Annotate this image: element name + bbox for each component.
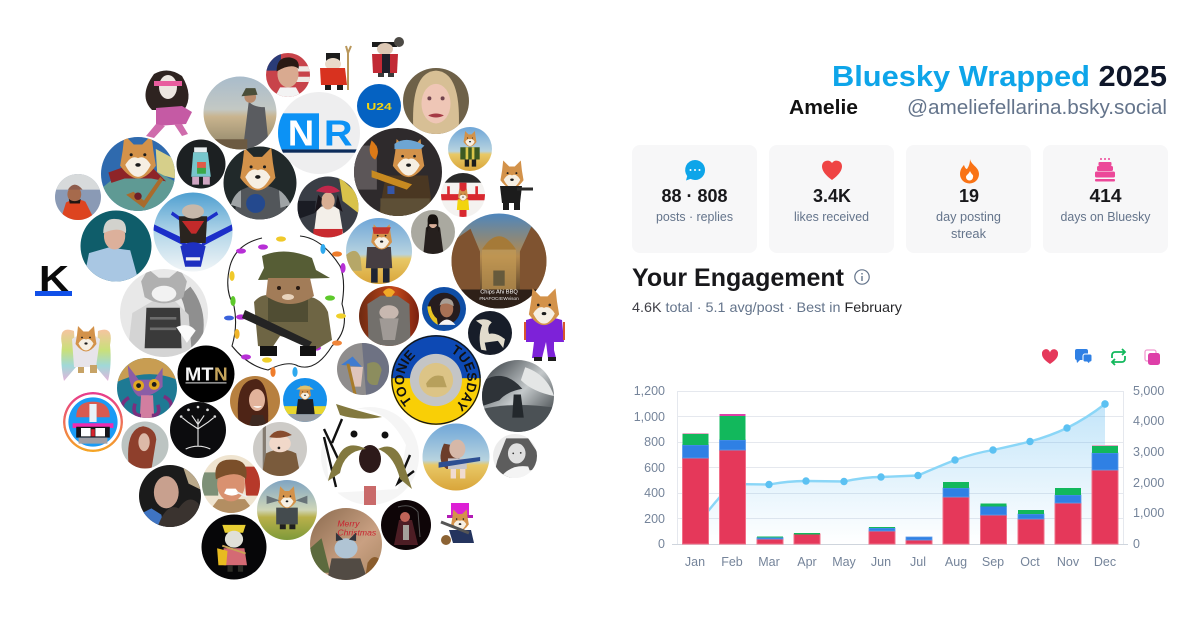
right axis labels: 2,000 (1133, 476, 1164, 490)
month labels: Jan (685, 555, 705, 569)
icon: info (855, 270, 869, 284)
avatar: doge in suit sticker (500, 160, 533, 210)
chart legend (1042, 349, 1160, 365)
avatar: white horse figurine (468, 311, 512, 355)
avatar: glass jar palace: Chips Ahi BBQ (480, 289, 518, 295)
handle: @ameliefellarina.bsky.social (907, 97, 1167, 119)
avatar: Kate portrait (230, 376, 280, 426)
stacked bars: reposts (682, 416, 1118, 538)
left axis labels: 0 (658, 537, 665, 551)
month labels: Oct (1020, 555, 1040, 569)
stat value: 19 (959, 186, 979, 206)
avatar: Merry Christmas cat: Merry (337, 519, 360, 529)
stat card: posts and replies (632, 145, 757, 253)
left axis labels: 400 (644, 486, 665, 500)
avatar: doge with purple top hat sticker (441, 503, 474, 545)
right axis labels (1133, 384, 1164, 551)
left axis labels: 1,200 (634, 384, 665, 398)
avatar: teal masked figure (176, 140, 226, 188)
avatar: doge with guitar in wheat (422, 424, 490, 490)
month labels: Feb (721, 555, 743, 569)
stat value: 414 (1090, 186, 1122, 206)
avatar: K logo: K (39, 258, 69, 299)
icon: flame (960, 159, 979, 184)
avatar: Georgian flag doge (441, 173, 485, 217)
right axis labels: 3,000 (1133, 445, 1164, 459)
left axis labels: 1,000 (634, 410, 665, 424)
month labels: Mar (758, 555, 780, 569)
avatar: blonde woman (403, 68, 469, 134)
cumulative line (695, 404, 1105, 528)
avatar: Toonie Tuesday coin badge (391, 335, 481, 425)
icon: heart (822, 161, 842, 180)
left axis labels (634, 384, 665, 551)
stat value: 88 · 808 (662, 186, 728, 206)
avatar: doge in front of burning Kremlin (354, 128, 442, 216)
avatar: doge in purple tracksuit sticker (525, 288, 564, 361)
avatar: stormy wave (482, 360, 554, 432)
display name: Amelie (789, 97, 858, 119)
stat label: likes received (794, 209, 869, 224)
avatar: Merry Christmas cat: Christmas (337, 527, 377, 537)
avatar: woman with cat (139, 465, 201, 527)
stat label: days on Bluesky (1060, 209, 1151, 224)
cumulative area (695, 404, 1105, 544)
avatar: doge scout in wheat (346, 218, 412, 284)
avatar: armored shiba with axe (101, 135, 175, 211)
stat label: posts · replies (656, 209, 733, 224)
avatar: rainbow angel doge sticker (61, 326, 111, 381)
cat (242, 251, 332, 356)
avatar: doge in fur coat with scumbag hat (253, 422, 307, 476)
month labels (685, 555, 1116, 569)
month labels: Aug (945, 555, 967, 569)
avatar: MTN logo: N (214, 363, 228, 384)
legend: replies (1075, 349, 1092, 364)
stat label: day posting (936, 209, 1001, 224)
left axis labels: 200 (644, 512, 665, 526)
stat card: days on Bluesky (1043, 145, 1168, 253)
engagement chart (634, 384, 1164, 569)
string of lights (228, 236, 344, 370)
month labels: Nov (1057, 555, 1080, 569)
engagement summary: 4.6K total · 5.1 avg/post · Best in February (632, 299, 902, 315)
stat card: streak (906, 145, 1031, 253)
stacked bars: likes (682, 450, 1118, 544)
avatar: woman in laurel badge (422, 287, 466, 331)
avatar: red-haired woman (122, 422, 168, 468)
avatar: glass jar palace (452, 214, 546, 308)
avatar: small dog in blue circle (283, 378, 327, 422)
avatar bubble cluster (35, 37, 565, 580)
stacked bars: replies (682, 440, 1118, 540)
month labels: Dec (1094, 555, 1116, 569)
stat card: likes (769, 145, 894, 253)
avatar: soldier cat with Christmas lights (224, 236, 346, 377)
avatar: woman in black jacket (411, 210, 455, 254)
avatar: white cartoon with moustache (321, 404, 419, 505)
right axis labels: 0 (1133, 537, 1140, 551)
avatar: Ukrainian girl (298, 176, 358, 238)
bulbs (224, 236, 346, 377)
avatar: dog in floral dress sticker (145, 70, 192, 138)
legend: reposts (1112, 349, 1125, 365)
avatar: NR logo (278, 92, 360, 174)
month labels: Jun (871, 555, 891, 569)
avatar: shiba in EU armor (224, 146, 296, 220)
avatar: wizard doge in fire (359, 286, 419, 346)
stat value: 3.4K (813, 186, 851, 206)
avatar: lemur with tentacles (117, 358, 177, 418)
avatar: monochrome woman (493, 434, 537, 478)
line markers (765, 400, 1109, 488)
avatar: doge on blue plane in clouds (154, 192, 232, 272)
avatar: doge in wheat field with jets (257, 480, 317, 540)
avatar: MTN logo: MT (185, 363, 214, 384)
avatar: reaper (381, 500, 431, 550)
stacked bars: quotes (682, 414, 1118, 446)
icon: cake (1095, 158, 1115, 182)
avatar: NR logo: R (324, 112, 353, 153)
avatar: white tree of Gondor (170, 402, 226, 458)
avatar: Merry Christmas cat (310, 508, 382, 580)
right axis labels: 1,000 (1133, 506, 1164, 520)
avatar: NR logo: N (288, 112, 314, 153)
avatar: chimney sweep sticker (372, 37, 404, 77)
avatar: doge in black background with Ukrainian hat (202, 514, 266, 580)
avatar: beefeater sticker (320, 46, 351, 90)
stat label second line: streak (951, 226, 986, 241)
avatar: small doge in wheat field (448, 127, 492, 171)
avatar: U24 (357, 84, 401, 128)
left axis labels: 600 (644, 461, 665, 475)
avatar: grey wizard with blue hat (337, 343, 389, 395)
avatar: steal-your-face badge (63, 392, 123, 452)
month labels: May (832, 555, 857, 569)
avatar: fox in tactical vest, black and white (120, 269, 208, 357)
month labels: Apr (797, 555, 817, 569)
avatar: retro man smoking (202, 455, 260, 513)
title: Bluesky Wrapped 2025 (832, 61, 1167, 93)
avatar: grey-haired man in blue shirt (80, 210, 152, 282)
avatar: glass jar palace: #NAFOCrEWvison (479, 296, 519, 302)
legend: quotes (1145, 350, 1160, 365)
left axis labels: 800 (644, 435, 665, 449)
avatar: MTN logo (178, 346, 234, 402)
month labels: Jul (910, 555, 926, 569)
right axis labels: 5,000 (1133, 384, 1164, 398)
avatar: hiker overlooking plain (204, 76, 276, 150)
December marker (1101, 400, 1109, 408)
avatar: man in red parka (55, 174, 101, 220)
avatar: Toonie Tuesday coin badge: TOONIE (394, 350, 416, 407)
legend: likes (1042, 349, 1058, 364)
right axis labels: 4,000 (1133, 414, 1164, 428)
avatar: man with flag (266, 53, 310, 97)
icon: chat bubble (685, 160, 705, 180)
month labels: Sep (982, 555, 1004, 569)
chart grid (672, 391, 1128, 544)
avatar: Toonie Tuesday coin badge: TUESDAY (453, 344, 477, 412)
section heading: Your Engagement (632, 264, 845, 292)
avatar: U24: U24 (366, 101, 392, 113)
